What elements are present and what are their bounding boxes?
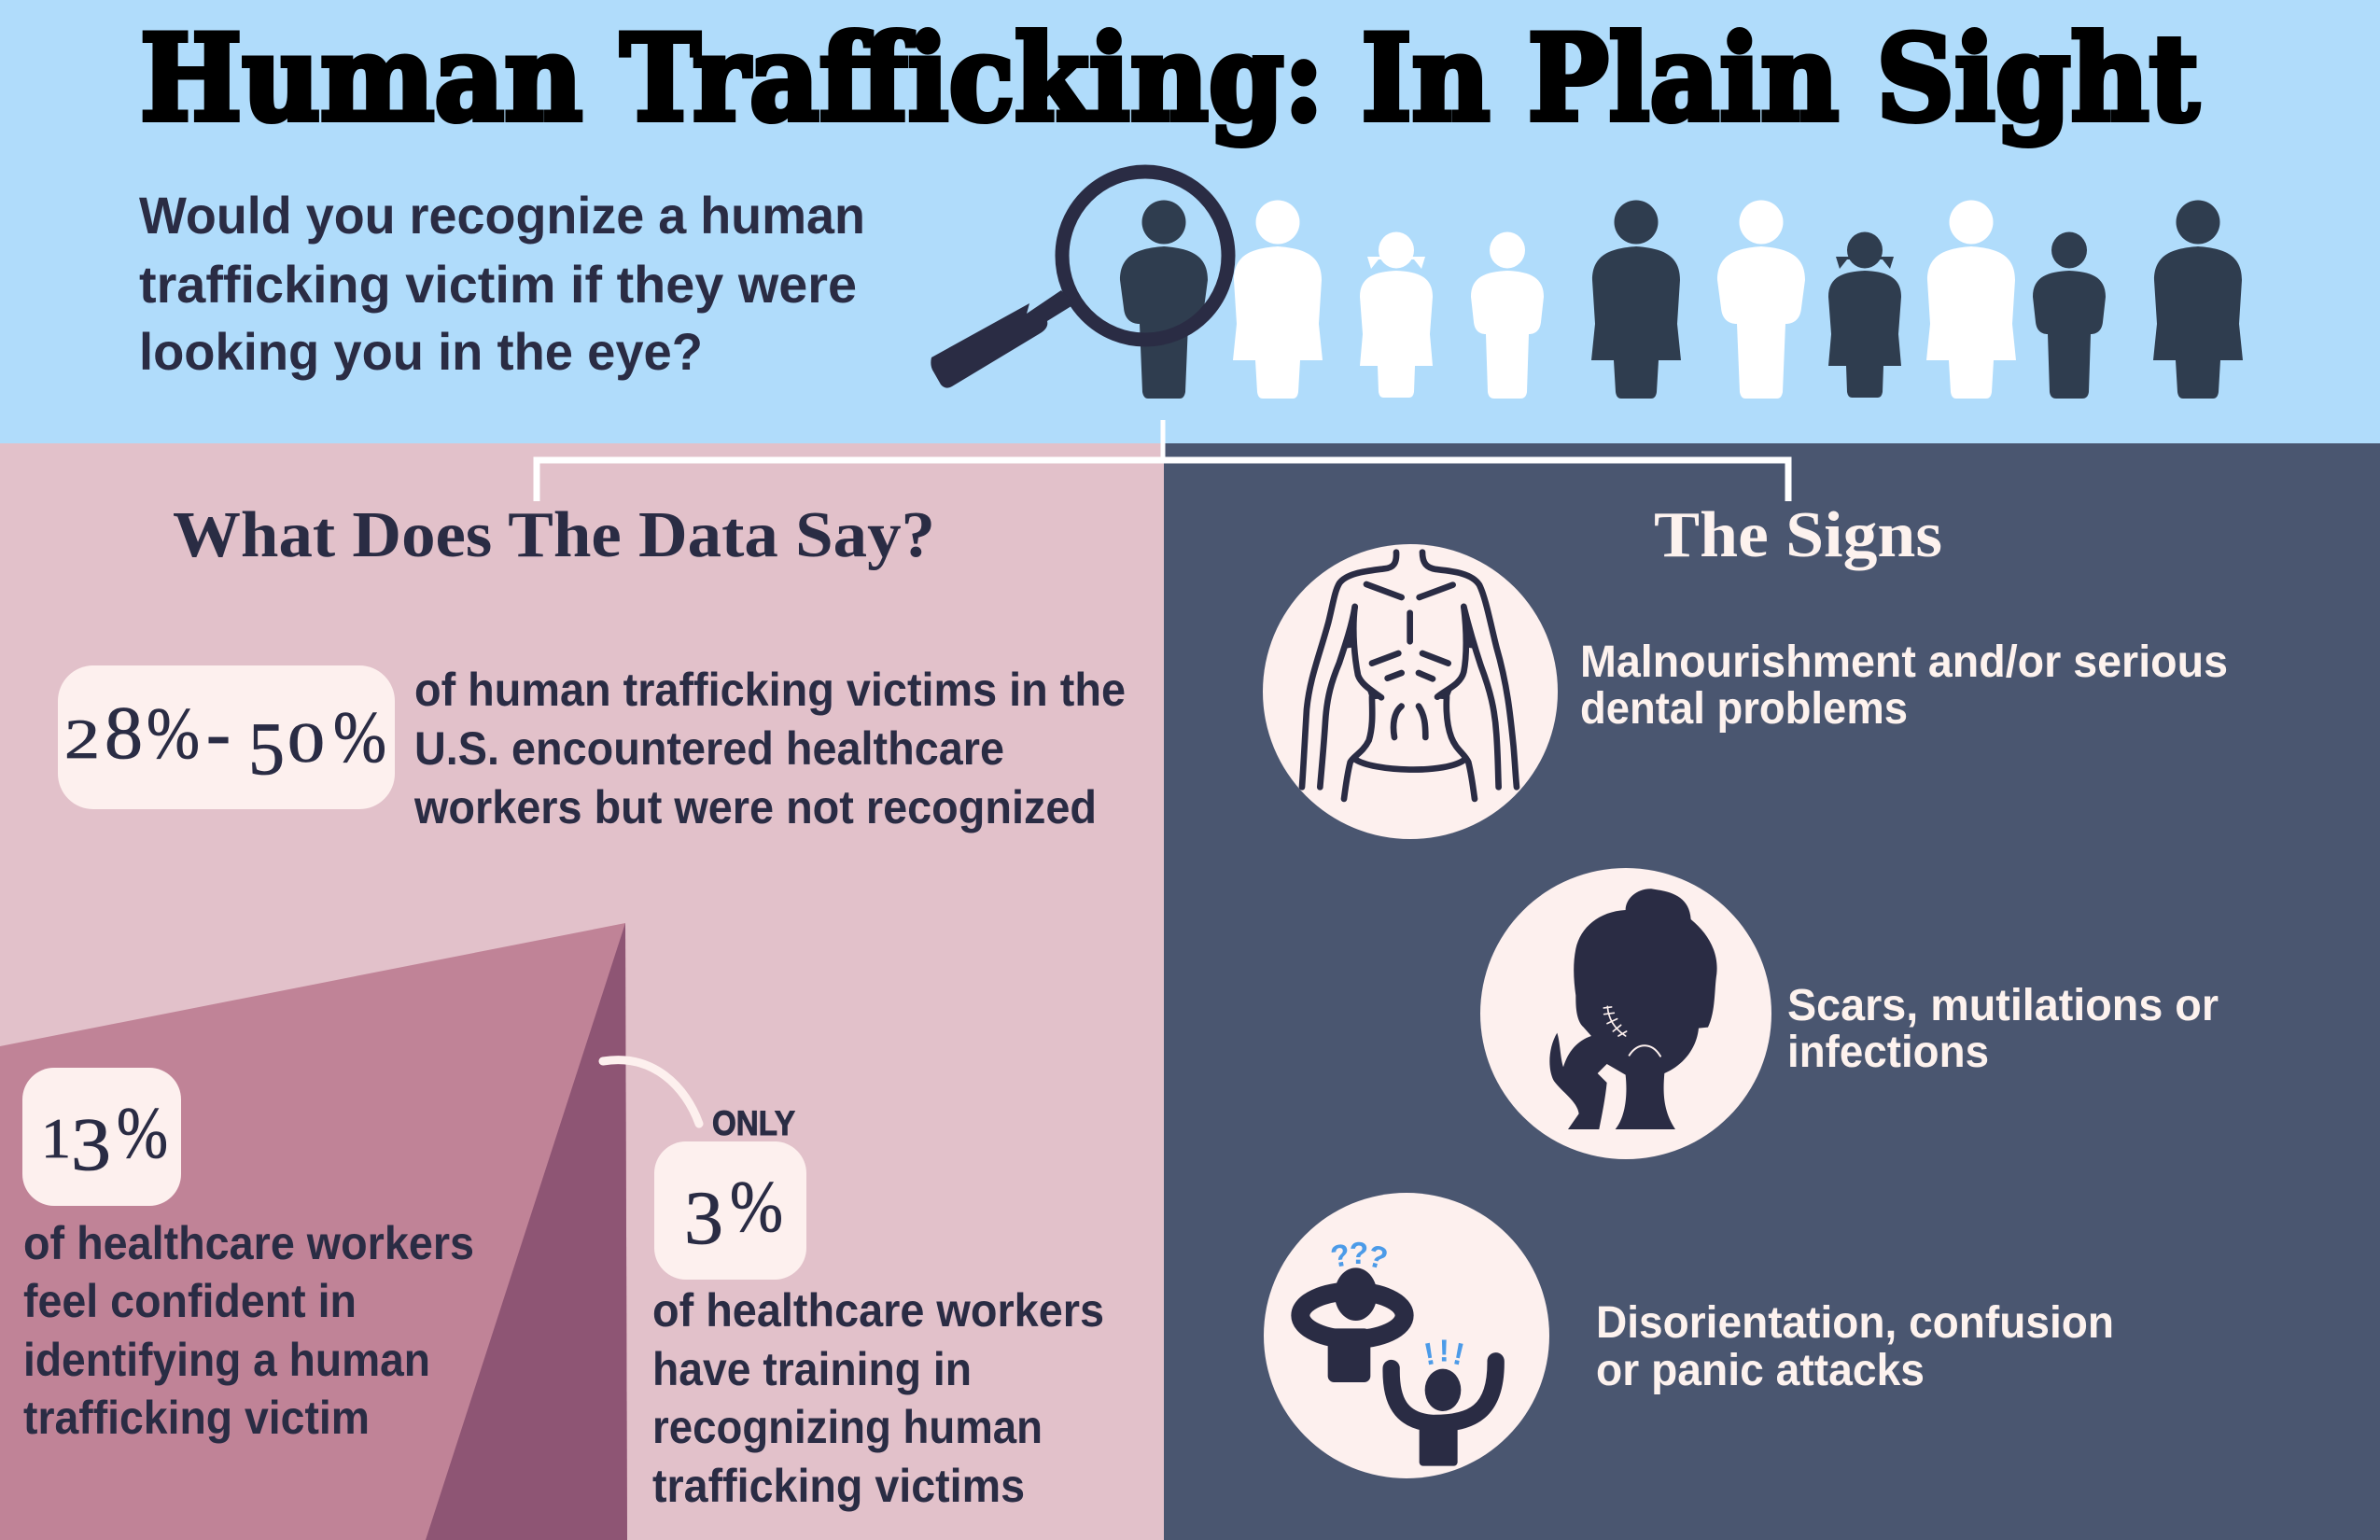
subtitle question: Would you recognize a human bbox=[139, 186, 865, 245]
text: disorientation bbox=[1596, 1298, 2114, 1395]
person 10: woman, dark bbox=[2153, 200, 2243, 399]
text: malnourishment: Malnourishment and/or serious bbox=[1580, 637, 2228, 687]
stat: 28%-50% badge: 0 bbox=[287, 712, 325, 774]
stat: 13% badge: 1 bbox=[41, 1108, 71, 1169]
person 6: man, white bbox=[1717, 200, 1805, 399]
stat: 28%-50% badge bbox=[58, 665, 395, 809]
person 1: man, dark bbox=[1120, 200, 1208, 399]
subtitle question: trafficking victim if they were bbox=[139, 255, 857, 314]
stat: 28%-50% badge: - bbox=[206, 693, 231, 775]
icon: confused and panicked people: ? bbox=[1350, 1237, 1368, 1271]
person 8: woman, white bbox=[1926, 200, 2016, 399]
text: 13 percent description: identifying a human bbox=[23, 1334, 430, 1386]
text: malnourishment bbox=[1580, 637, 2228, 734]
text: 3 percent description: have training in bbox=[652, 1343, 972, 1395]
subtitle question bbox=[139, 186, 865, 381]
text: 28-50 description: of human trafficking victims in the bbox=[414, 664, 1126, 716]
subtitle question: looking you in the eye? bbox=[139, 322, 703, 381]
person 9: boy, dark bbox=[2033, 231, 2106, 399]
stat: 28%-50% badge: % bbox=[147, 693, 200, 774]
label: only: ONLY bbox=[712, 1104, 795, 1142]
text: 13 percent description: of healthcare workers bbox=[23, 1217, 474, 1269]
text: scars: infections bbox=[1787, 1028, 1989, 1077]
text: 3 percent description: recognizing human bbox=[652, 1401, 1043, 1453]
person 4: boy, white bbox=[1471, 231, 1544, 399]
header panel bbox=[0, 0, 2380, 443]
text: scars: Scars, mutilations or bbox=[1787, 981, 2219, 1030]
text: 28-50 description bbox=[413, 664, 1126, 833]
stat: 28%-50% badge: 8 bbox=[105, 693, 143, 775]
stat: 3% badge: 3 bbox=[684, 1175, 723, 1260]
text: 13 percent description: feel confident in bbox=[23, 1275, 357, 1327]
heading: the signs: The Signs bbox=[1654, 499, 1942, 571]
icon: scarred head bbox=[1480, 868, 1771, 1159]
stat: 13% badge: 3 bbox=[71, 1104, 111, 1186]
title: Human Trafficking: In Plain Sight bbox=[140, 9, 2199, 147]
stat: 13% badge bbox=[22, 1068, 181, 1206]
chart: 13 percent wedge bbox=[0, 923, 627, 1540]
text: disorientation: or panic attacks bbox=[1596, 1346, 1925, 1395]
icon: confused and panicked people bbox=[1264, 1193, 1549, 1478]
heading: what does the data say: What Does The Data Say? bbox=[173, 499, 935, 571]
text: 28-50 description: U.S. encountered healthcare bbox=[414, 722, 1004, 775]
icon: confused and panicked people: ? bbox=[1328, 1238, 1352, 1275]
stat: 28%-50% badge: 5 bbox=[248, 708, 285, 791]
stat: 28%-50% badge: 2 bbox=[64, 708, 100, 770]
icon: confused and panicked people: ? bbox=[1364, 1239, 1392, 1277]
panel: what does the data say background bbox=[0, 443, 1164, 1540]
panel: the signs background bbox=[1164, 443, 2380, 1540]
text: 13 percent description: trafficking victim bbox=[23, 1392, 370, 1444]
icon: confused and panicked people: ! bbox=[1439, 1335, 1449, 1369]
text: 3 percent description: trafficking victims bbox=[652, 1460, 1025, 1512]
text: 13 percent description bbox=[23, 1217, 474, 1444]
person 5: woman, dark bbox=[1591, 200, 1681, 399]
connector bracket bbox=[537, 420, 1788, 501]
icon: confused and panicked people: ! bbox=[1449, 1337, 1467, 1373]
person 2: woman, white bbox=[1233, 200, 1323, 399]
text: scars bbox=[1787, 981, 2219, 1077]
person 7: girl, dark bbox=[1828, 231, 1901, 398]
text: 3 percent description bbox=[652, 1284, 1104, 1512]
stat: 3% badge bbox=[654, 1141, 806, 1280]
arrow: curved pointer bbox=[603, 1060, 699, 1124]
stat: 13% badge: % bbox=[117, 1092, 168, 1173]
icon: confused and panicked people: ! bbox=[1421, 1337, 1437, 1373]
icon: magnifying glass bbox=[931, 172, 1228, 388]
chart: 3 percent wedge bbox=[426, 923, 627, 1540]
icon: malnourished torso bbox=[1263, 544, 1558, 839]
text: disorientation: Disorientation, confusion bbox=[1596, 1298, 2114, 1348]
text: 3 percent description: of healthcare workers bbox=[652, 1284, 1104, 1337]
stat: 3% badge: % bbox=[730, 1166, 783, 1247]
row of people bbox=[1120, 200, 2243, 399]
text: malnourishment: dental problems bbox=[1580, 684, 1908, 734]
stat: 28%-50% badge: % bbox=[333, 696, 386, 777]
person 3: girl, white bbox=[1360, 231, 1433, 398]
text: 28-50 description: workers but were not recognized bbox=[413, 781, 1097, 833]
